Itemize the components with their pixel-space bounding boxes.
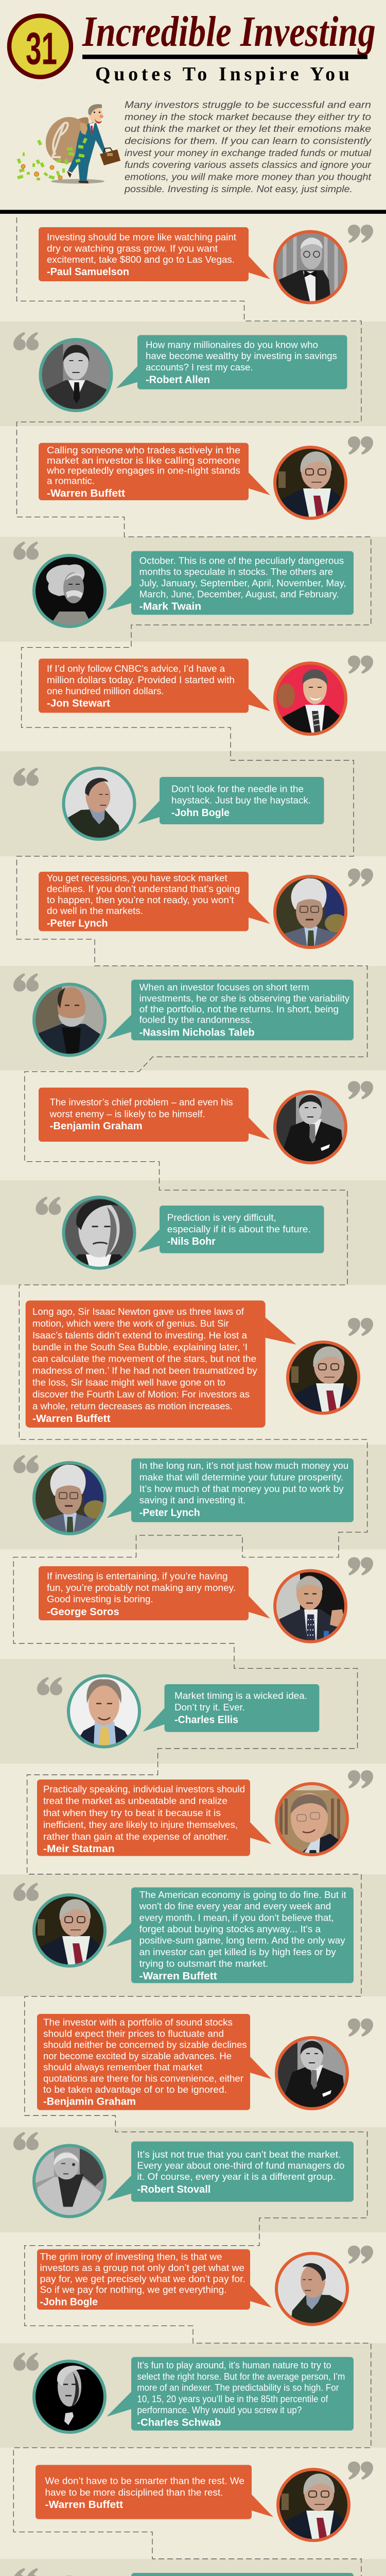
speech bubble [26,1300,296,1428]
quote text: every month. I mean, if you don't believe that, [139,1912,334,1923]
icon: closing quote mark [348,655,373,674]
speech bubble [107,2357,354,2431]
quote text: worst enemy – is likely to be himself. [49,1108,205,1119]
speech bubble [37,2249,272,2310]
speech bubble [138,777,324,824]
quote text: inefficient, they are likely to injure themselves, [43,1819,238,1830]
speech bubble [138,1206,324,1253]
speech bubble [39,1088,270,1142]
quote text: it. Of course, every year it is a different group. [137,2171,336,2182]
quote text: of the portfolio, not the returns. In short, being [139,1004,339,1014]
speech bubble [107,980,354,1040]
portrait: Benjamin Graham [276,2037,348,2109]
portrait: Nassim Nicholas Taleb [33,984,106,1056]
quote text: -Charles Schwab [137,2416,221,2429]
quote text: have to be more disciplined than the rest. [45,2487,223,2498]
header divider bar [0,210,386,214]
speech bubble [37,2014,272,2110]
icon: opening quote mark [13,973,39,991]
illustration: businessman carrying money sack [17,104,120,183]
quote text: It’s fun to play around, it’s human nature to try to [137,2360,331,2370]
icon: opening quote mark [13,2568,39,2576]
quote text: July, January, September, April, November, May, [139,578,346,588]
quote text: The grim irony of investing then, is that we [40,2251,222,2262]
speech bubble [107,1887,354,1983]
quote text: should always remember that market [43,2062,202,2072]
speech bubble [107,2141,354,2202]
quote text: -Warren Buffett [45,2499,123,2511]
quote text: more of an indexer. The predictability is so high. For [137,2382,339,2393]
quote text [40,2251,245,2308]
portrait: John Bogle [276,2253,348,2325]
quote text: If investing is entertaining, if you’re having [47,1571,227,1582]
quote text: accounts? I rest my case. [146,362,253,372]
quote text: motion, which were the work of genius. But Sir [32,1318,229,1329]
quote text [146,339,337,385]
portrait: George Soros [274,1570,346,1642]
icon: opening quote mark [13,541,39,560]
quote text: saving it and investing it. [139,1495,245,1505]
quote 14: Charles Ellis [37,1675,319,1748]
portrait: Warren Buffett [274,447,346,519]
quote text: Prediction is very difficult, [167,1212,276,1223]
quote 20: Charles Schwab [13,2352,354,2433]
icon: opening quote mark [13,2352,39,2371]
quote text: -Charles Ellis [174,1714,238,1725]
speech bubble [107,2573,354,2576]
title underline [82,55,367,59]
portrait: Nils Bohr [63,1197,135,1269]
icon: opening quote mark [36,1197,61,1215]
quote text [49,1096,233,1132]
icon: closing quote mark [348,1318,373,1336]
quote 18: Robert Stovall [13,2132,354,2217]
quote text: Don’t try it. Ever. [174,1702,245,1713]
quote text: -Jon Stewart [47,698,110,709]
quote 4: Mark Twain [13,541,354,627]
intro paragraph: out think the market or they let their emotions make [125,124,371,134]
quote text: The American economy is going to do fine. But it [139,1889,346,1900]
quote text: -George Soros [47,1606,119,1618]
icon: closing quote mark [348,2019,373,2037]
speech bubble [116,335,347,389]
header badge: 31 [9,15,71,77]
icon: opening quote mark [37,1677,62,1695]
portrait: Mark Twain [33,555,106,627]
quote text [139,1460,348,1519]
quote text: -Robert Stovall [137,2183,210,2195]
intro paragraph: possible. Investing is simple. Not easy, just simple. [124,184,353,194]
quote text: pay for, we get precisely what we don’t pay for. [40,2273,245,2284]
icon: opening quote mark [13,768,39,786]
icon: opening quote mark [13,2132,39,2150]
speech bubble [143,1684,319,1732]
quote text: bundle in the South Sea Bubble, explaining later, ‘I [32,1342,248,1352]
quote text: fooled by the randomness. [139,1014,253,1025]
quote text: It’s just not true that you can’t beat the market. [137,2149,341,2160]
icon: closing quote mark [348,225,373,243]
quote 17: Benjamin Graham [37,2014,373,2110]
quote text: that when they try to beat it because it is [43,1807,221,1818]
quote text [47,873,240,929]
quote text: When an investor focuses on short term [139,982,309,992]
quote text: Investing should be more like watching paint [47,232,236,243]
quote 10: Nils Bohr [36,1197,324,1269]
quote text: -John Bogle [171,807,230,819]
portrait: Benjamin Graham [274,1091,346,1163]
quote 15: Meir Statman [37,1770,373,1856]
quote 22: Daniel Kahneman [13,2568,354,2576]
quote text [32,1306,257,1425]
intro paragraph [124,100,372,194]
portrait: John Bogle [63,768,135,840]
speech bubble [107,1459,354,1522]
icon: closing quote mark [348,1081,373,1099]
quote text: quotations are there for his convenience, either [43,2073,243,2083]
quote text: Long ago, Sir Isaac Newton gave us three laws of [32,1306,244,1317]
quote text: The investor with a portfolio of sound stocks [43,2016,233,2028]
intro paragraph: decisions for them. If you can learn to consistently [125,136,372,146]
quote text: treat the market as unbeatable and realize [43,1795,227,1806]
quote text [139,555,346,612]
quote text: performance. Why would you screw it up? [137,2404,302,2415]
quote text: -Robert Allen [146,374,210,385]
quote 19: John Bogle [37,2246,373,2325]
quote text [171,784,311,819]
quote text: Calling someone who trades actively in the [47,445,240,455]
quote 11: Warren Buffett on Newton [26,1300,373,1428]
quote text: market an investor is like calling someone [47,455,240,466]
quote text: especially if it is about the future. [167,1224,311,1234]
quote 1: Paul Samuelson [39,225,373,303]
quote text: It’s how much of that money you put to work by [139,1483,344,1494]
intro paragraph: funds covering various assets classics and ignore your [125,160,372,170]
quote text [47,1571,236,1618]
quote text: dry or watching grass grow. If you want [47,243,218,253]
quote text: to be taken advantage of or to be ignored. [43,2084,227,2095]
quote text [47,232,236,278]
quote 7: Peter Lynch [39,869,373,948]
intro paragraph: money in the stock market because they either try to [125,112,371,122]
quote text: discover the Fourth Law of Motion: For investors as [32,1389,250,1399]
quote text: Good investing is boring. [47,1594,153,1604]
quote text: In the long run, it’s not just how much money you [139,1460,348,1471]
quote text: -Nils Bohr [167,1235,216,1247]
quote text [167,1212,311,1247]
quote 5: Jon Stewart [39,655,373,735]
quote text: haystack. Just buy the haystack. [171,794,311,806]
quote text: -Peter Lynch [139,1507,200,1519]
quote text [139,1889,346,1982]
quote text: declines. If you don’t understand that’s going [47,883,240,894]
quote text: positive-sum game, long term. And the only way [139,1935,345,1946]
portrait: Robert Allen [40,339,112,411]
quote text: have become wealthy by investing in savings [146,350,337,361]
quote text: -Warren Buffett [47,487,125,499]
quote text: March, June, December, August, and February. [139,589,339,600]
quote text: trying to outsmart the market. [139,1958,268,1969]
icon: closing quote mark [348,2462,373,2480]
subtitle: Quotes To Inspire You [95,63,349,85]
quote 13: George Soros [39,1557,373,1642]
portrait: Peter Lynch [274,876,347,948]
quote text: won't do fine every year and every week and [139,1901,331,1911]
speech bubble [39,443,270,500]
quote text: can calculate the movement of the stars, but not the [32,1353,256,1364]
portrait: Peter Lynch [33,1462,107,1534]
quote text: million dollars today. Provided I started with [47,674,235,685]
intro paragraph: invest your money in exchange traded funds or mutual [125,148,372,158]
quote text: -Benjamin Graham [50,1120,143,1132]
quote 3: Warren Buffett [39,436,373,519]
quote text [45,2476,244,2511]
portrait: Meir Statman [276,1783,348,1855]
speech bubble [107,551,354,615]
quote text: -Paul Samuelson [47,266,129,278]
speech bubble [39,872,270,931]
quote text: to happen, then you’re not ready, you won’t [47,894,234,905]
quote 12: Peter Lynch [13,1455,354,1534]
quote text: Practically speaking, individual investors should [43,1784,245,1794]
speech bubble [39,1566,270,1620]
quote text [46,445,240,499]
quote text: forget about buying stocks anyway... It's a [139,1923,321,1934]
portrait: Warren Buffett [287,1342,359,1414]
quote 2: Robert Allen [13,332,347,411]
quote text: select the right horse. But for the average person, I’m [137,2371,345,2382]
quote text: rather than gain at the expense of another. [43,1831,229,1842]
portrait: Charles Schwab [33,2361,106,2433]
quote text: Don’t look for the needle in the [171,784,304,794]
speech bubble [36,2465,273,2519]
quote text: Market timing is a wicked idea. [174,1690,307,1701]
portrait: Robert Stovall [33,2145,106,2217]
quote text: should neither be concerned by sizable declines [43,2039,247,2050]
quote text: do well in the markets. [47,905,143,916]
portrait: Paul Samuelson [274,231,346,303]
quote text: the loss, Sir Isaac might well have gone on to [32,1377,225,1388]
header badge: 31: 31 [26,23,57,74]
intro paragraph: emotions, you will make more money than you thought [125,172,372,182]
quote text: nor become excited by sizable advances. He [43,2050,232,2061]
quote text: -Meir Statman [43,1843,115,1855]
quote text [43,1784,245,1855]
quote text: If I’d only follow CNBC’s advice, I’d have a [47,663,225,674]
quote 6: John Bogle [13,768,324,840]
quote text: Every year about one-third of fund managers do [137,2160,344,2171]
quote text: who repeatedly engages in one-night stands [46,465,240,476]
quote text [137,2149,344,2195]
speech bubble [37,1780,272,1856]
quote text [47,663,235,709]
portrait: Warren Buffett [33,1894,106,1967]
quote text: -Warren Buffett [139,1970,217,1982]
quote text: make that will determine your future prosperity. [139,1471,343,1482]
quote text: How many millionaires do you know who [146,339,318,350]
quote text: -Mark Twain [139,600,201,612]
quote text: an investor can get killed is by high fees or by [139,1946,336,1957]
portrait: Charles Ellis [68,1675,140,1748]
icon: opening quote mark [13,1883,39,1901]
quote text: should expect their prices to fluctuate and [43,2028,224,2039]
quote 16: Warren Buffett on the American economy [13,1883,354,1983]
quote text: We don’t have to be smarter than the rest. We [45,2476,244,2486]
quote text [174,1690,307,1725]
quote text: -John Bogle [40,2296,98,2308]
quote text [43,2016,247,2108]
quote text: fun, you’re probably not making any money. [47,1582,236,1593]
quote text: one hundred million dollars. [47,685,164,697]
quote text: madness of men.’ If he had not been traumatized by [32,1365,257,1376]
icon: closing quote mark [348,869,373,887]
quote text: So if we pay for nothing, we get everything. [40,2284,227,2295]
quote text [139,982,350,1038]
icon: closing quote mark [348,436,373,454]
icon: opening quote mark [13,1455,39,1473]
portrait: Warren Buffett [277,2469,349,2541]
quote text: investments, he or she is observing the variability [139,993,350,1004]
portrait: Jon Stewart [274,663,346,735]
intro paragraph: Many investors struggle to be successful and earn [125,100,371,110]
quote text: a romantic. [47,475,95,486]
quote text: -Benjamin Graham [43,2096,136,2108]
icon: closing quote mark [348,1557,373,1575]
quote text: You get recessions, you have stock market [47,873,227,883]
quote text: a whole, return decreases as motion increases. [32,1400,233,1411]
icon: opening quote mark [13,332,39,350]
quote text: months to speculate in stocks. The others are [139,566,333,577]
quote text: -Peter Lynch [47,917,108,929]
icon: closing quote mark [348,2246,373,2264]
quote text: 10, 15, 20 years you’ll be in the 85th percentile of [137,2393,328,2404]
quote text: Isaac’s talents didn’t extend to investing. He lost a [32,1330,248,1341]
speech bubble [39,227,270,281]
speech bubble [39,658,270,713]
quote text [137,2360,345,2429]
quote text: The investor’s chief problem – and even his [50,1096,233,1108]
icon: closing quote mark [348,1770,373,1789]
quote text: -Nassim Nicholas Taleb [139,1026,255,1038]
quote text: excitement, take $800 and go to Las Vegas. [47,254,235,265]
quote 21: Warren Buffett [36,2462,373,2541]
quote 9: Benjamin Graham [39,1081,373,1163]
quote text: investors as a group not only don’t get what we [40,2262,244,2273]
quote 8: Nassim Nicholas Taleb [13,973,354,1056]
quote text: October. This is one of the peculiarly dangerous [139,555,344,566]
quote text: -Warren Buffett [32,1413,111,1425]
